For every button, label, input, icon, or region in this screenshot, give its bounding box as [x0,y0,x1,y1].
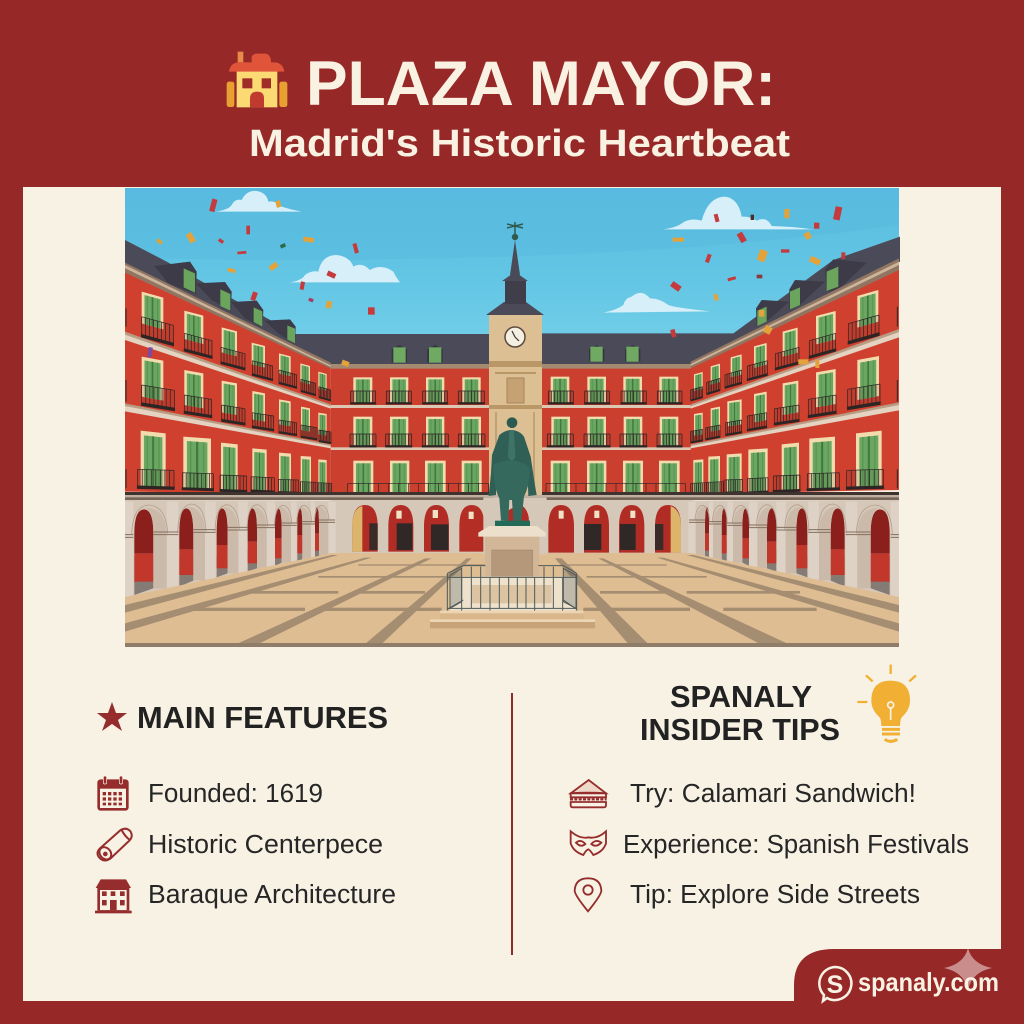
heading: insider tips [640,679,840,747]
center-left arcade [331,492,494,555]
footer logo tab [794,948,1024,1002]
tower clock [505,327,525,347]
right half of the building [520,237,900,555]
right wing arcade [686,492,899,597]
left wing windows [141,292,327,494]
arcade behind statue [483,495,547,554]
logo mark [819,967,851,1001]
pedestal [430,526,595,628]
logo mark: S [827,971,843,999]
text: historic centerpiece: Historic Centerpece [148,831,383,859]
sparkle [944,948,992,990]
heading: insider tips: INSIDER TIPS [640,712,840,747]
left roof [125,240,490,364]
text: baroque architecture: Baraque Architecture [148,881,396,909]
right wing windows [693,290,882,494]
text: spanish festivals: Experience: Spanish Festivals [623,831,969,859]
text: calamari sandwich: Try: Calamari Sandwich! [630,780,916,808]
center-right arcade [520,492,693,555]
text: side streets: Tip: Explore Side Streets [630,881,920,909]
panel: main features [95,700,396,913]
cornice and ledges [691,258,899,368]
subtitle: Madrid's Historic Heartbeat [249,123,790,165]
left half of the building [125,240,494,555]
icon: yellow house [227,52,287,107]
plaza ground [125,553,899,647]
right dormers [589,259,867,362]
icon: light bulb [857,665,916,741]
divider [511,693,513,955]
plaza illustration [125,188,900,647]
fence [447,566,577,611]
title block [227,49,790,165]
equestrian statue and pedestal [430,417,595,628]
icon: building [95,879,132,913]
icon: sandwich [570,780,607,807]
right roof [542,237,900,365]
icon: location pin [575,878,601,911]
clock tower [486,222,544,495]
weather vane [507,222,523,240]
heading: insider tips: SPANALY [670,679,812,714]
sky [125,188,899,358]
logo text: spanaly.com [858,967,999,997]
icon: star [97,702,127,731]
icon: scroll [97,829,132,862]
icon: festival mask [571,831,606,855]
text: founded: Founded: 1619 [148,780,323,808]
statue [489,417,537,526]
left wing wall [125,270,331,494]
left dormers [154,262,443,363]
left wing balconies [126,308,332,495]
center-left windows [348,377,488,494]
clouds [215,191,813,313]
center wall right [540,367,692,495]
left wing arcade [125,492,338,597]
center wall left [331,367,491,495]
heading: main features: MAIN FEATURES [137,700,388,735]
panel: insider tips [570,665,969,911]
center-right windows [546,377,685,494]
heading: Plaza Mayor: PLAZA MAYOR: [306,49,776,119]
confetti [147,199,845,368]
cornice and ledges [125,263,331,369]
right wing balconies [690,307,897,495]
cream panel [23,187,1001,1001]
icon: calendar [97,776,129,811]
right wing wall [691,267,899,494]
